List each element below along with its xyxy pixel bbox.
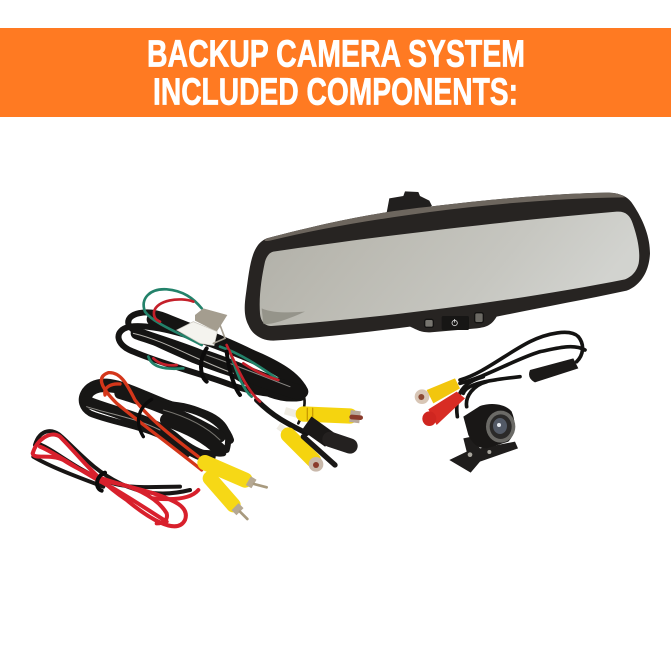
cable ties — [201, 348, 240, 395]
orange title banner — [0, 28, 671, 117]
black cable loops — [118, 312, 307, 433]
red and black power wire — [33, 431, 198, 526]
green wire — [144, 289, 277, 397]
white connector with terminals — [177, 308, 227, 346]
backup camera — [415, 332, 585, 473]
middle power and video cable — [82, 373, 267, 519]
black wire — [33, 431, 190, 493]
upper wiring harness — [118, 289, 361, 472]
mirror buttons — [425, 313, 483, 330]
rearview mirror — [245, 191, 650, 341]
yellow RCA socket, lower — [278, 426, 323, 472]
cable tie — [138, 399, 152, 437]
yellow RCA socket — [415, 378, 460, 404]
mirror mount — [387, 191, 432, 213]
camera lens — [486, 411, 515, 443]
title — [147, 34, 525, 114]
title: INCLUDED COMPONENTS: — [153, 72, 518, 114]
mirror glass — [260, 212, 639, 326]
mirror top surface — [265, 193, 625, 241]
red wire — [153, 299, 278, 402]
cable tie — [97, 473, 105, 491]
title: BACKUP CAMERA SYSTEM — [147, 34, 525, 76]
mounting bracket — [449, 437, 518, 473]
yellow RCA plug, upper — [205, 463, 267, 487]
mirror housing — [245, 193, 650, 341]
red wire — [101, 373, 202, 470]
camera cable — [457, 332, 585, 417]
camera body — [463, 404, 515, 448]
red wire — [33, 435, 198, 526]
black cable loops — [82, 382, 230, 457]
black power jack — [303, 423, 350, 465]
red power jack — [422, 392, 465, 426]
yellow RCA socket, right — [285, 408, 361, 420]
inline cable module — [529, 358, 578, 382]
yellow RCA plug, lower — [210, 478, 247, 519]
